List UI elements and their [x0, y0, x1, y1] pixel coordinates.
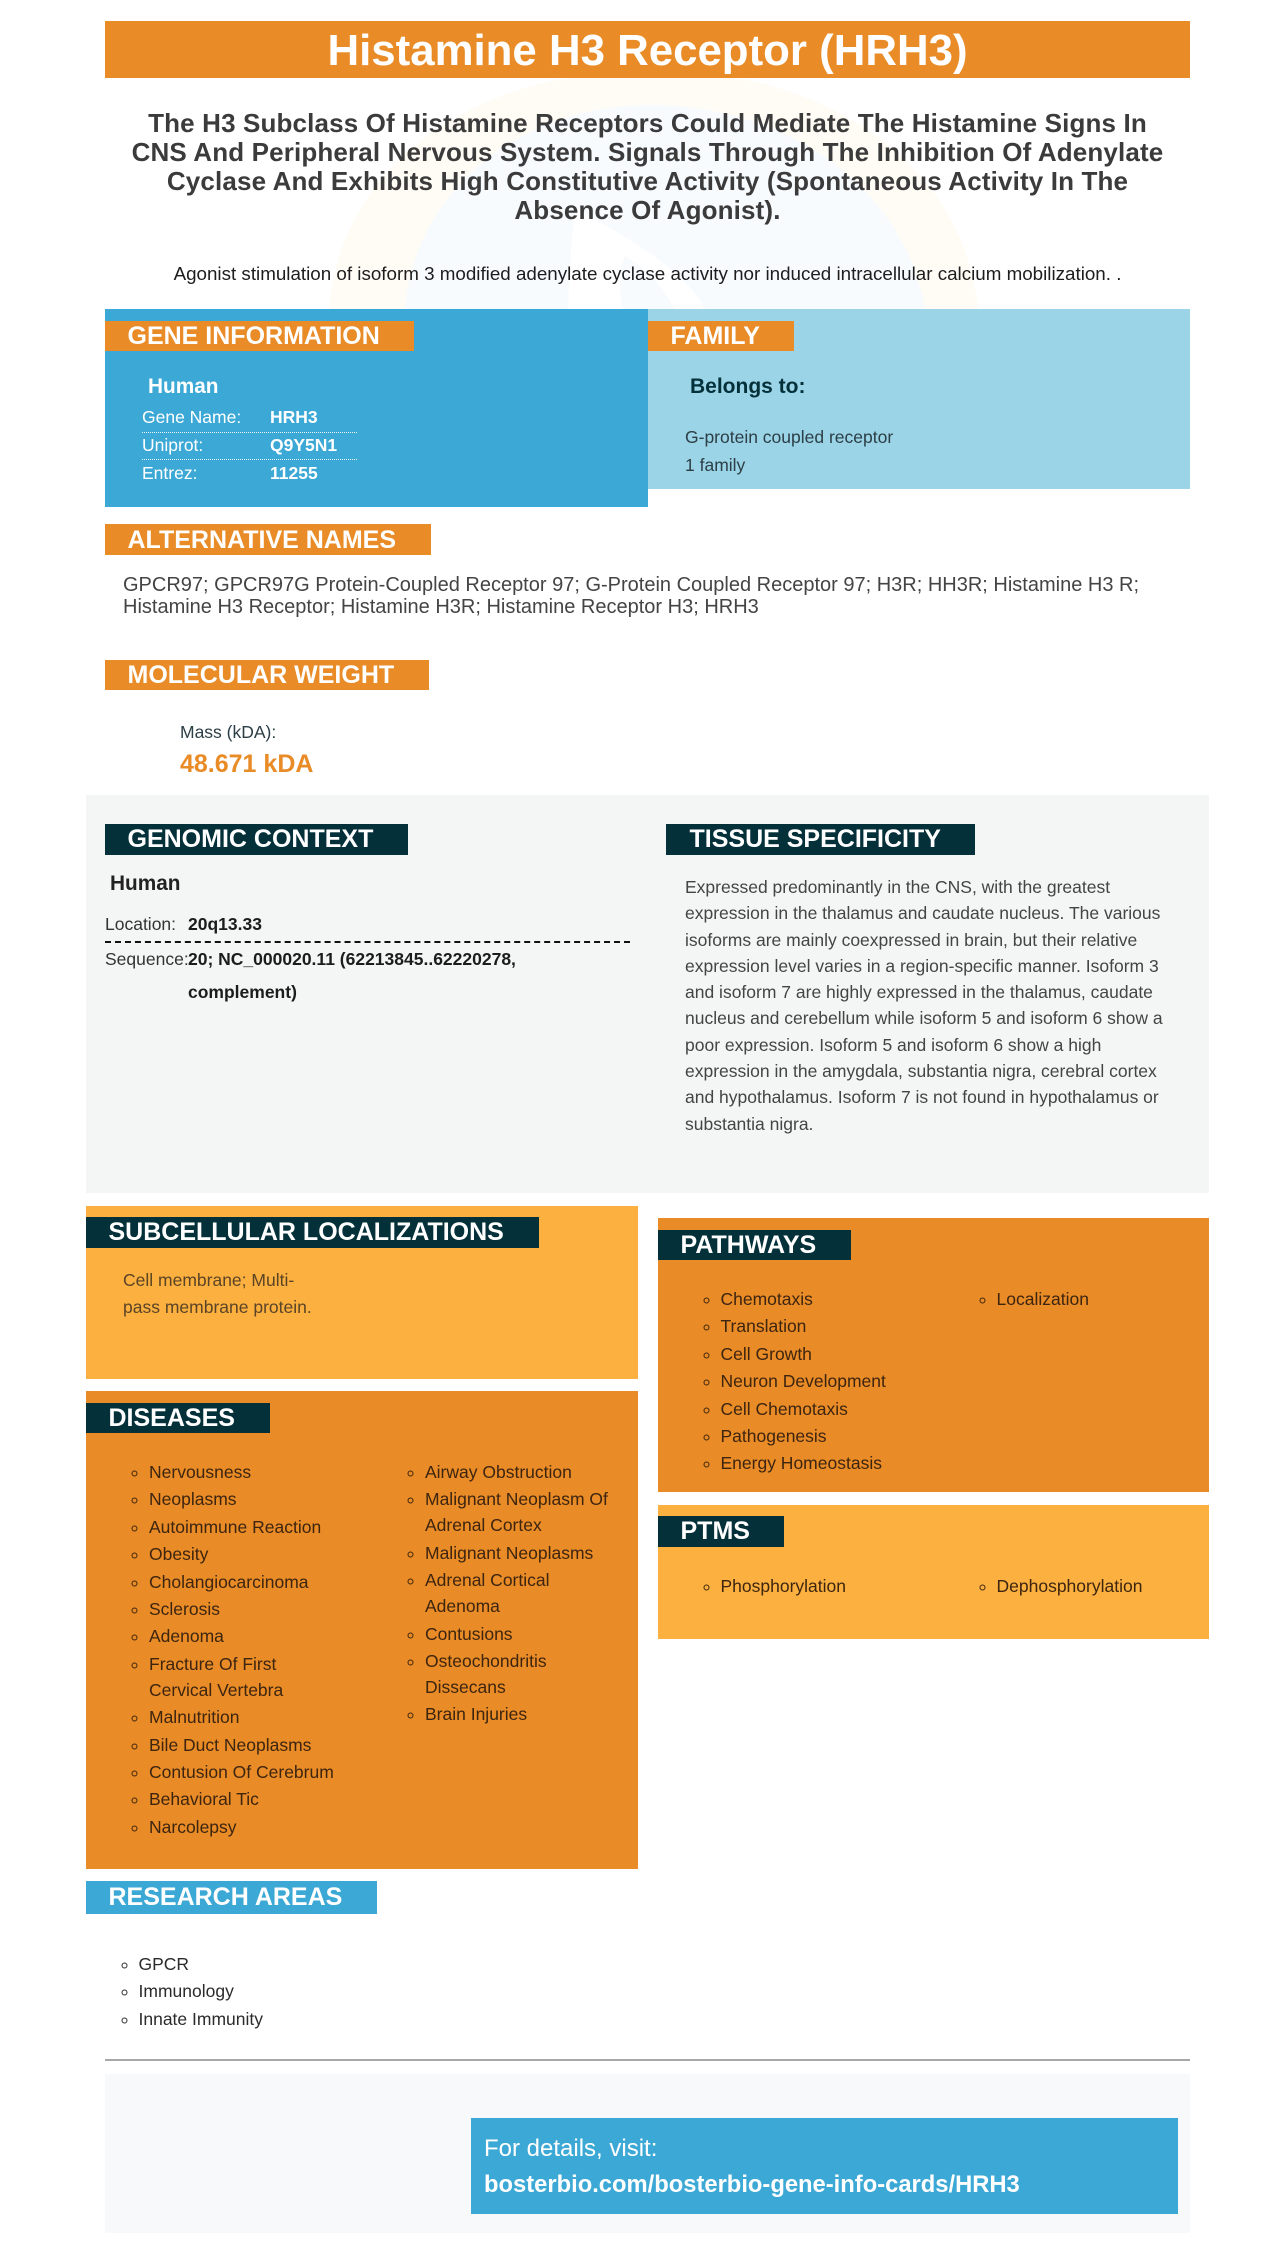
subcellular text: pass membrane protein.: [123, 1296, 312, 1316]
panel: PTMs: [658, 1505, 1209, 1639]
diseases list column 1: Cholangiocarcinoma: [149, 1572, 309, 1592]
family text: [685, 427, 893, 475]
research areas list: Immunology: [138, 1981, 234, 2001]
pathways list column 1: Cell Chemotaxis: [720, 1399, 848, 1419]
sequence row: complement): [188, 982, 297, 1002]
tissue specificity text: Expressed predominantly in the CNS, with the greatest: [685, 877, 1110, 897]
panel: footer: [105, 2074, 1190, 2233]
sequence row: Sequence:: [105, 948, 189, 968]
heading: family: FAMILY: [670, 322, 760, 350]
diseases list column 2: Brain Injuries: [425, 1704, 527, 1724]
heading: PTMs: PTMS: [680, 1517, 750, 1545]
heading: pathways: PATHWAYS: [680, 1231, 816, 1259]
diseases list column 2: Adrenal Cortex: [425, 1515, 542, 1535]
location row: 20q13.33: [188, 914, 262, 934]
subtitle description: Absence Of Agonist).: [514, 194, 781, 224]
pathways list column 1: Cell Growth: [720, 1344, 812, 1364]
subtitle description: Cyclase And Exhibits High Constitutive Activity (Spontaneous Activity In The: [167, 166, 1128, 196]
diseases list column 2: Osteochondritis: [425, 1651, 547, 1671]
PTMs list column 1: Phosphorylation: [720, 1576, 846, 1596]
uniprot row: Q9Y5N1: [270, 435, 337, 455]
uniprot row: [142, 433, 357, 460]
research areas list: GPCR: [138, 1954, 189, 1974]
tissue specificity text: substantia nigra.: [685, 1114, 813, 1134]
diseases list column 1: Bile Duct Neoplasms: [149, 1735, 311, 1755]
callout: details link: [471, 2118, 1178, 2214]
alternative names text: Histamine H3 Receptor; Histamine H3R; Histamine Receptor H3; HRH3: [123, 596, 759, 618]
family text: 1 family: [685, 455, 745, 475]
heading: gene information: GENE INFORMATION: [128, 322, 380, 350]
subtitle description: CNS And Peripheral Nervous System. Signals Through The Inhibition Of Adenylate: [132, 136, 1163, 166]
pathways list column 1: Pathogenesis: [720, 1426, 827, 1446]
sequence row: 20; NC_000020.11 (62213845..62220278,: [188, 948, 516, 968]
tissue specificity text: [685, 877, 1163, 1134]
diseases list column 1: Sclerosis: [149, 1599, 220, 1619]
gene name row: Gene Name:: [142, 406, 241, 426]
panel: family: [648, 309, 1190, 489]
alternative names text: [123, 574, 1139, 618]
alternative names text: GPCR97; GPCR97G Protein-Coupled Receptor 97; G-Protein Coupled Receptor 97; H3R; HH3R; Histamine H3 R;: [123, 574, 1139, 596]
panel: pathways: [658, 1218, 1209, 1492]
subcellular text: Cell membrane; Multi-: [123, 1270, 294, 1290]
intro text: Agonist stimulation of isoform 3 modified adenylate cyclase activity nor induced intracellular calcium mobilization. .: [174, 263, 1121, 284]
pathways list column 2: Localization: [996, 1289, 1089, 1309]
diseases list column 1: Nervousness: [149, 1462, 251, 1482]
heading: subcellular localizations: SUBCELLULAR LOCALIZATIONS: [108, 1218, 504, 1246]
diseases list column 2: Adenoma: [425, 1596, 500, 1616]
belongs to label: Belongs to:: [690, 375, 806, 398]
research areas list: Innate Immunity: [138, 2009, 263, 2029]
callout label: For details, visit:: [484, 2135, 657, 2162]
gene name row: [142, 404, 357, 433]
diseases list column 1: Adenoma: [149, 1626, 224, 1646]
diseases list column 2: Contusions: [425, 1624, 513, 1644]
title: [105, 21, 1190, 78]
entrez row: Entrez:: [142, 463, 197, 483]
species label: Human: [148, 375, 218, 398]
pathways list column 1: Translation: [720, 1316, 806, 1336]
entrez row: 11255: [270, 463, 318, 483]
diseases list column 2: [408, 1462, 608, 1724]
heading: research areas: RESEARCH AREAS: [108, 1883, 342, 1911]
heading: research areas: [86, 1881, 377, 1914]
panel: genomic context and tissue specificity: [86, 795, 1209, 1193]
tissue specificity text: nucleus and cerebellum while isoform 5 and isoform 6 show a: [685, 1008, 1163, 1028]
diseases list column 2: Malignant Neoplasms: [425, 1543, 593, 1563]
subtitle description: The H3 Subclass Of Histamine Receptors Could Mediate The Histamine Signs In: [148, 108, 1147, 138]
heading: diseases: [86, 1403, 270, 1433]
research areas list: [122, 1954, 263, 2029]
diseases list column 1: Behavioral Tic: [149, 1789, 259, 1809]
panel: diseases: [86, 1391, 638, 1869]
panel: subcellular localizations: [86, 1206, 638, 1379]
diseases list column 1: Neoplasms: [149, 1489, 237, 1509]
pathways list column 1: Neuron Development: [720, 1371, 886, 1391]
heading: pathways: [658, 1230, 851, 1260]
location row: Location:: [105, 914, 176, 934]
heading: genomic context: GENOMIC CONTEXT: [128, 825, 373, 853]
sequence row: [105, 948, 516, 1002]
callout url: bosterbio.com/bosterbio-gene-info-cards/HRH3: [484, 2171, 1020, 2198]
uniprot row: Uniprot:: [142, 435, 203, 455]
diseases list column 1: [132, 1462, 334, 1837]
tissue specificity text: expression level varies in a region-specific manner. Isoform 3: [685, 956, 1159, 976]
diseases list column 1: Obesity: [149, 1544, 208, 1564]
tissue specificity text: isoforms are mainly coexpressed in brain, but their relative: [685, 930, 1137, 950]
pathways list column 1: Energy Homeostasis: [720, 1453, 882, 1473]
tissue specificity text: expression in the amygdala, substantia nigra, cerebral cortex: [685, 1061, 1157, 1081]
panel: gene information: [105, 309, 648, 507]
heading: tissue specificity: TISSUE SPECIFICITY: [690, 825, 941, 853]
subcellular text: [123, 1270, 312, 1316]
background watermark arcs: [329, 78, 978, 309]
diseases list column 2: Dissecans: [425, 1677, 506, 1697]
heading: diseases: DISEASES: [108, 1404, 235, 1432]
species label: Human: [110, 872, 180, 895]
mass value: 48.671 kDA: [180, 750, 313, 778]
diseases list column 1: Malnutrition: [149, 1707, 239, 1727]
diseases list column 1: Autoimmune Reaction: [149, 1517, 321, 1537]
pathways list column 1: [704, 1289, 886, 1473]
family text: G-protein coupled receptor: [685, 427, 893, 447]
heading: molecular weight: MOLECULAR WEIGHT: [128, 661, 394, 689]
entrez row: [142, 463, 318, 483]
tissue specificity text: and hypothalamus. Isoform 7 is not found in hypothalamus or: [685, 1087, 1159, 1107]
diseases list column 2: Airway Obstruction: [425, 1462, 572, 1482]
diseases list column 1: Narcolepsy: [149, 1817, 237, 1837]
title: Histamine H3 Receptor (HRH3): [327, 26, 968, 75]
subtitle description: [132, 108, 1163, 224]
mass label: Mass (kDA):: [180, 722, 276, 742]
diseases list column 2: Malignant Neoplasm Of: [425, 1489, 608, 1509]
tissue specificity text: poor expression. Isoform 5 and isoform 6 show a high: [685, 1035, 1101, 1055]
pathways list column 1: Chemotaxis: [720, 1289, 813, 1309]
PTMs list column 2: Dephosphorylation: [996, 1576, 1142, 1596]
diseases list column 1: Contusion Of Cerebrum: [149, 1762, 334, 1782]
heading: PTMs: [658, 1516, 784, 1547]
diseases list column 1: Fracture Of First: [149, 1654, 276, 1674]
location row: [105, 911, 630, 943]
tissue specificity text: and isoform 7 are highly expressed in the thalamus, caudate: [685, 982, 1153, 1002]
diseases list column 2: Adrenal Cortical: [425, 1570, 550, 1590]
gene name row: HRH3: [270, 406, 318, 426]
diseases list column 1: Cervical Vertebra: [149, 1680, 283, 1700]
heading: alternative names: ALTERNATIVE NAMES: [128, 526, 396, 554]
heading: family: [648, 321, 794, 351]
tissue specificity text: expression in the thalamus and caudate nucleus. The various: [685, 903, 1160, 923]
